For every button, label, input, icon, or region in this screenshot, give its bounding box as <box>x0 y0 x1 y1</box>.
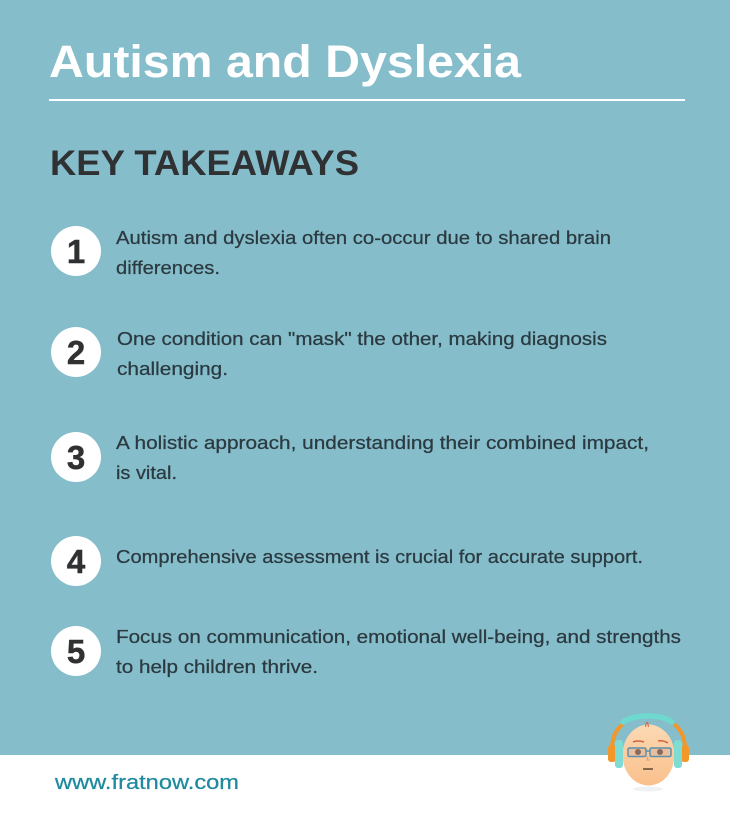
takeaway 5: 5 <box>67 633 85 670</box>
takeaway 2: One condition can "mask" the other, making diagnosis <box>117 328 607 349</box>
takeaway 5: to help children thrive. <box>116 656 318 677</box>
takeaway 1: differences. <box>116 257 220 278</box>
takeaway 5: Focus on communication, emotional well-being, and strengths <box>116 626 681 647</box>
takeaway 2 <box>51 327 607 379</box>
takeaway 2: 2 <box>67 334 85 371</box>
icon: mascot with headphones <box>608 716 689 792</box>
takeaway 3: 3 <box>67 439 85 476</box>
takeaway 4: 4 <box>67 543 86 580</box>
takeaway 4: Comprehensive assessment is crucial for accurate support. <box>116 546 643 567</box>
footer band <box>0 755 730 820</box>
takeaway 3: is vital. <box>116 462 177 483</box>
takeaway 1: Autism and dyslexia often co-occur due to shared brain <box>116 227 611 248</box>
takeaway 3 <box>51 432 649 483</box>
takeaway 1: 1 <box>67 233 85 270</box>
website url: www.fratnow.com <box>54 772 239 794</box>
takeaway 3: A holistic approach, understanding their combined impact, <box>116 432 649 453</box>
takeaway 5 <box>51 626 681 677</box>
heading: key takeaways: KEY TAKEAWAYS <box>50 144 359 183</box>
takeaway 4 <box>51 536 643 586</box>
takeaway 2: challenging. <box>117 358 228 379</box>
takeaway 1 <box>51 226 611 278</box>
title: Autism and Dyslexia <box>49 36 522 87</box>
